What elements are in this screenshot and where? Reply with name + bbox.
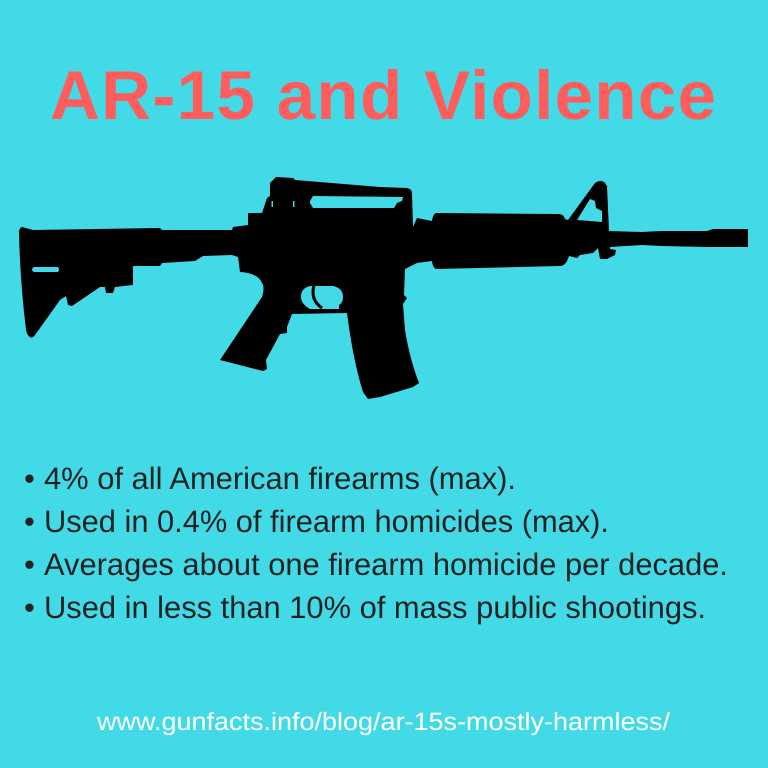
bullet: homicide rate: Averages about one firearm homicide per decade. — [44, 547, 728, 582]
bullet: mass shootings: • — [24, 590, 35, 625]
icon: AR-15 rifle silhouette — [19, 177, 748, 399]
bullet: homicide rate: • — [24, 547, 35, 582]
source link: www.gunfacts.info/blog/ar-15s-mostly-harmless/ — [96, 708, 670, 736]
icon: trigger — [313, 285, 322, 308]
bullet: share of homicides: • — [24, 504, 35, 539]
title: AR-15 and Violence — [50, 57, 716, 134]
bullet: mass shootings: Used in less than 10% of mass public shootings. — [44, 590, 706, 625]
bullet: share of firearms: • — [24, 461, 35, 496]
bullet: share of homicides: Used in 0.4% of firearm homicides (max). — [44, 504, 609, 539]
bullet list — [24, 461, 728, 625]
bullet: share of firearms: 4% of all American firearms (max). — [44, 461, 516, 496]
